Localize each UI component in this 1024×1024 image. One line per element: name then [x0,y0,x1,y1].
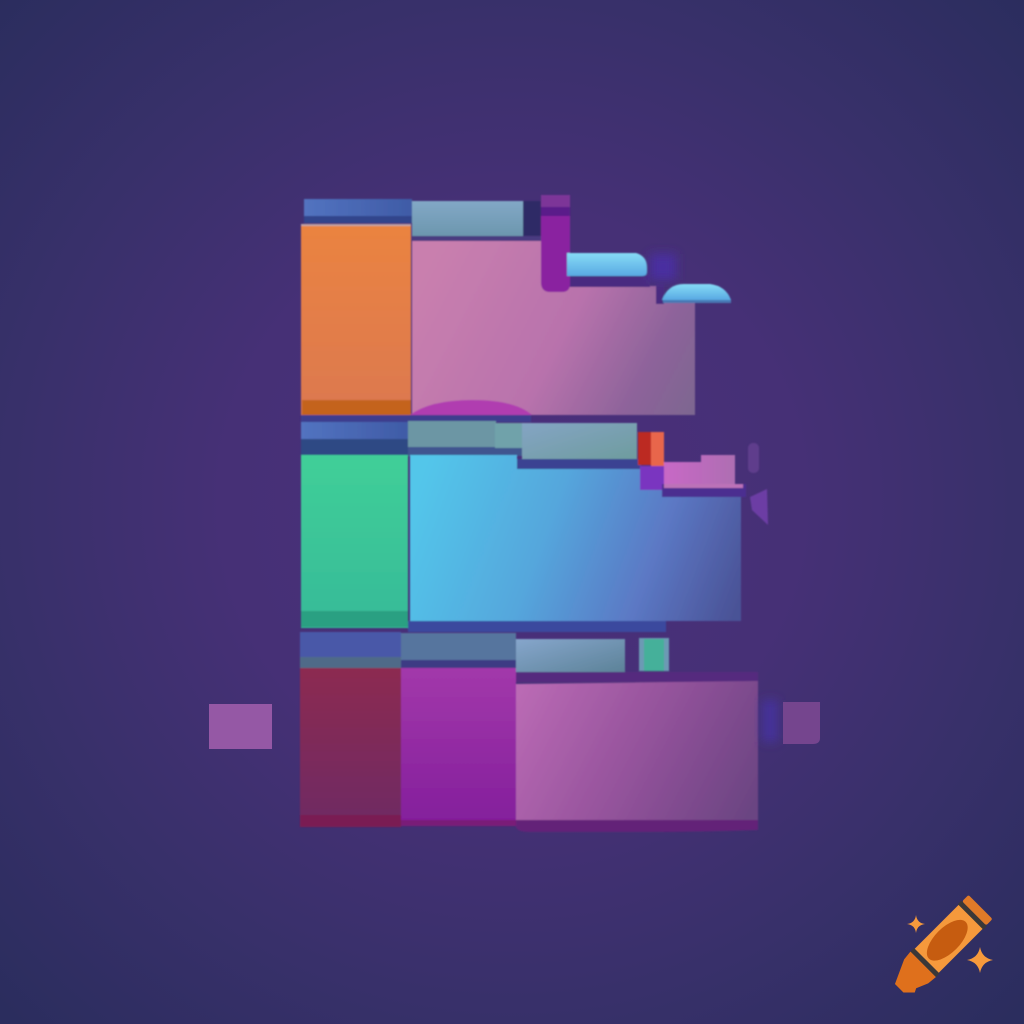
top row main block [412,241,695,415]
top row orange highlight strip [301,224,411,226]
middle row dark top band [301,415,531,422]
right square glow [762,700,778,742]
right floating square [783,702,820,744]
sparkle small [907,915,925,933]
middle row pink tab foot [664,484,743,488]
top row header shade [304,216,412,223]
middle row right accent [750,489,768,525]
left floating square [209,704,272,749]
bottom row purple base [401,820,516,826]
bottom row header shade [300,657,401,668]
middle row under-tab band [408,447,522,456]
panel: middle stacked row [301,400,768,632]
sparkle large [967,947,993,973]
panel: stacked chart [300,195,768,832]
middle row bottom band [408,621,666,632]
icon: crayon watermark [886,894,993,1001]
top row notch [656,284,664,304]
crayon upper band [958,901,987,930]
crayon cap [962,895,993,925]
panel: bottom stacked row [300,632,758,832]
bottom row green marker core [644,639,664,671]
middle row header bar [301,422,408,439]
crayon tip [886,952,936,1001]
bottom row header bar [300,632,401,657]
bottom row green marker [639,638,669,671]
crayon oval [920,913,975,967]
top row dark connector [523,201,542,241]
top row purple stem [541,195,570,292]
middle row pink tab [664,455,735,484]
panel: top stacked row [301,195,731,415]
bottom row main block [516,681,758,820]
middle row main block [410,455,741,621]
top row orange block [301,224,411,415]
bottom row crimson base [300,815,401,827]
middle row header shade [301,439,408,455]
bottom row dark band [516,672,758,682]
top row orange base [302,400,411,415]
middle row first tab [408,421,496,447]
top row second cyan cap edge [663,299,731,303]
bottom row right base [516,820,758,832]
middle row top accent [748,443,759,473]
middle row violet block [640,466,664,490]
middle row first tab end [495,423,523,448]
middle row orange marker [651,432,664,468]
top row dark ledge [568,275,650,287]
middle row green block [301,455,408,628]
crayon lower band [911,948,940,977]
top row first cyan cap [567,253,647,276]
bottom row first tab [401,633,516,660]
middle row band under pink tab [662,484,746,497]
top row tab [412,201,523,236]
top row header bar [304,199,412,223]
middle row arc [410,400,532,415]
top row second cyan cap [662,284,731,300]
bottom row crimson block [300,668,401,815]
middle row under second tab band [517,459,641,470]
top row dark under-tab band [412,236,542,241]
middle row second tab [522,423,637,459]
bottom row purple block [401,668,516,820]
middle row green base [301,611,408,627]
top row stem cap [541,195,570,207]
top row stem band [541,207,570,216]
bottom row under-tab band [401,658,516,668]
crayon shape [886,894,993,1001]
crayon body [915,905,983,973]
bottom row second tab [516,639,625,672]
middle row red marker [638,432,652,465]
top row cyan glow [650,254,676,280]
